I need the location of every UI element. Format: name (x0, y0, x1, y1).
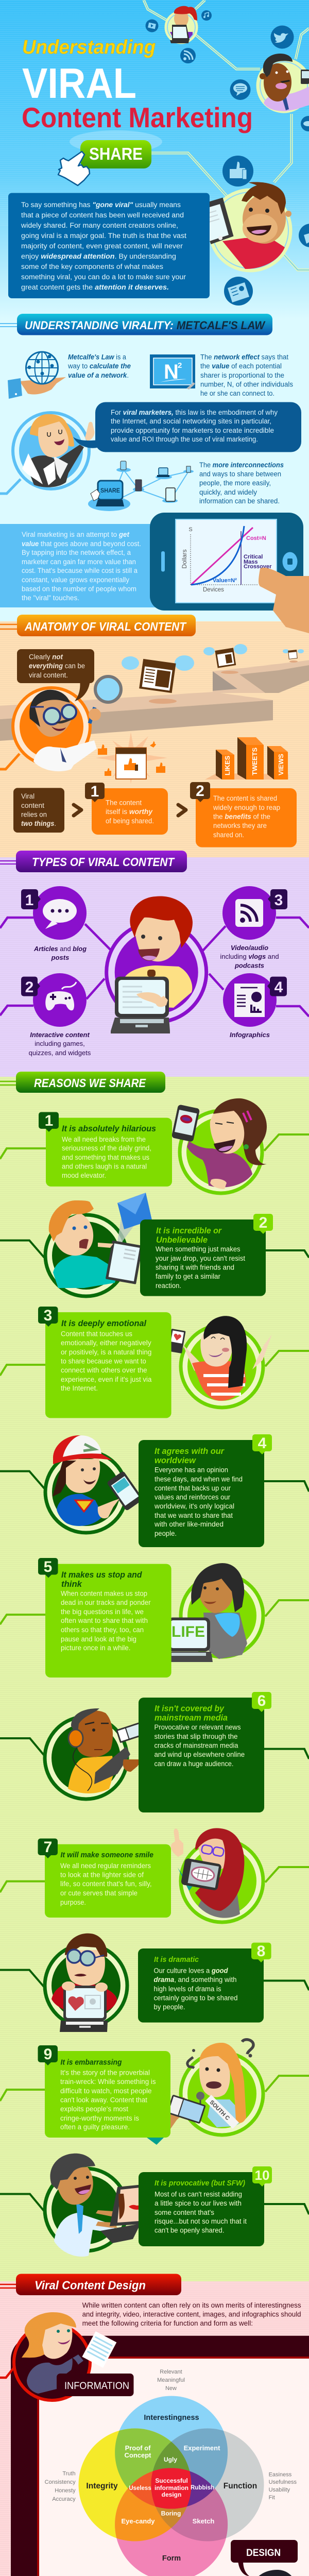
text: network effect: sharer is proportional to the (200, 371, 284, 379)
text: interconnections: information can be shared. (199, 497, 280, 505)
text box: embarrassing: exploits people's most (60, 2105, 128, 2113)
text box: mainstream media: cracks of mainstream media (154, 1742, 238, 1750)
text box: hilarious: and something that makes us (62, 1154, 149, 1161)
venn diagram: Accuracy (52, 2496, 76, 2502)
text box: smile: It will make someone smile (61, 1851, 153, 1859)
icon: chat (230, 79, 250, 100)
intro text box: that a piece of content has been well received and (21, 211, 184, 219)
icon: rss (180, 48, 196, 63)
type 2: interactive: 2 (25, 979, 33, 996)
chart: likes tweets views: LIKES (224, 755, 231, 775)
type 2: interactive: Interactive content (30, 1031, 90, 1039)
panel: anatomy of viral content (0, 615, 309, 847)
intro text box: some of the key components of what makes (21, 263, 163, 270)
text box: incredible: reaction. (156, 1282, 181, 1290)
venn diagram: Concept (125, 2451, 151, 2459)
icon: video (145, 20, 159, 32)
character: scientist with magnifier (0, 676, 121, 771)
text: criteria: While written content can often rely on its own merits of interestingness (82, 2301, 301, 2309)
text: network effect (200, 353, 293, 397)
heading: viral content design (0, 2274, 181, 2295)
intro text box: great content gets the attention it deserves. (21, 283, 169, 291)
reason 1 (39, 1098, 267, 1193)
icon: page with thumbs (96, 732, 167, 784)
character: man with headphones (45, 1708, 146, 1799)
band: viral marketing explanation (0, 524, 160, 607)
text box: provocative: 10 (255, 2167, 269, 2183)
venn diagram (45, 2369, 297, 2576)
text box: emotional: 3 (44, 1307, 52, 1324)
venn diagram: Integrity (86, 2482, 118, 2490)
text box: provocative (139, 2166, 272, 2246)
step 1: 1 (91, 783, 99, 800)
phone with chart (150, 513, 303, 611)
text box: mainstream media: Provocative or relevant news (154, 1723, 241, 1731)
text box: worldview: that we want to share that (154, 1512, 233, 1519)
reason 5 (38, 1558, 263, 1677)
text box: embarrassing (38, 2045, 170, 2138)
intro text box: To say something has "gone viral" usually means (21, 201, 181, 209)
text box: stop and think: dead in our tracks and ponder (61, 1599, 151, 1606)
band: viral marketing explanation: cost. That's because while cost is still a (22, 567, 138, 574)
character: girl with phone (167, 1316, 272, 1408)
icon: N squared: N (164, 361, 179, 383)
text box: incredible: your jaw drop, you can't resist (156, 1255, 245, 1262)
text box: hilarious: mood elevator. (62, 1172, 106, 1179)
venn diagram: Usability (269, 2487, 290, 2493)
text box: smile: or cute serves that simple (60, 1889, 138, 1897)
text box: provocative: It is provocative (but SFW) (154, 2179, 245, 2188)
step 1: itself is worthy (106, 808, 153, 816)
speech bubble: viral marketers: provide opportunity for marketers to create incredible (111, 427, 274, 434)
heading: viral content design: Viral Content Design (35, 2279, 146, 2292)
text box: worldview: Everyone has an opinion (154, 1466, 228, 1474)
venn diagram: New (165, 2385, 177, 2392)
reason 6 (45, 1692, 271, 1812)
text box: embarrassing: It is embarrassing (61, 2058, 122, 2067)
venn diagram: Usefulness (269, 2479, 297, 2485)
text box: mainstream media (139, 1692, 271, 1812)
band: viral marketing explanation: Viral marketing is an attempt to get (22, 531, 130, 538)
intro text box: enjoy widespread attention . By understanding (21, 252, 176, 260)
text box: embarrassing: can't look away. Content that (60, 2096, 147, 2104)
icon: globe on hand (8, 352, 66, 399)
band: viral marketing explanation: By tapping into the network effect, a (22, 549, 131, 556)
arrow (178, 805, 186, 816)
text box: worldview: content that backs up our (154, 1484, 231, 1492)
frame (11, 2336, 309, 2576)
venn diagram: Useless (129, 2485, 151, 2492)
speech bubble: viral marketers (73, 402, 301, 452)
character: designer with stylus (219, 2570, 304, 2576)
speech bubble: not everything (17, 649, 94, 701)
text: interconnections (199, 461, 284, 505)
venn diagram: Truth (62, 2471, 76, 2477)
share button: SHARE (89, 144, 143, 163)
text box: embarrassing: often a guilty pleasure. (60, 2123, 130, 2131)
character: pageant woman: SOUTH C (209, 2099, 231, 2122)
text box: dramatic: It is dramatic (154, 1955, 199, 1964)
reason 4 (45, 1434, 272, 1547)
speech bubble: viral marketers: value and ROI through the use of viral marketing. (111, 435, 258, 443)
text box: emotional: emotionally, either negatively (61, 1339, 151, 1347)
text box: provocative: a little spice to our lives with (154, 2199, 242, 2207)
text box: dramatic: drama, and something with (153, 1976, 237, 1984)
venn diagram: Proof of (125, 2444, 151, 2452)
icon: music (201, 10, 212, 21)
reason 7 (38, 1828, 263, 1922)
reason 9 (38, 2040, 263, 2145)
heading: anatomy (0, 615, 196, 636)
text box: worldview (139, 1434, 272, 1547)
step 2: networks they are (213, 822, 267, 829)
venn diagram: Experiment (184, 2444, 220, 2452)
chart: likes tweets views (205, 737, 288, 779)
arrow (74, 805, 81, 816)
text: interconnections: quickly, and widely (199, 488, 257, 496)
character: man with laptop (45, 2154, 148, 2257)
character: boy with tablet (196, 182, 291, 272)
step 1: of being shared. (106, 817, 154, 825)
text box: stop and think: picture once in a while. (61, 1644, 131, 1652)
character: man with laptop (107, 896, 207, 1033)
text box: provocative: can't be openly shared. (154, 2227, 225, 2234)
text box: stop and think: the big questions in life, we (61, 1608, 144, 1616)
intro text box: widely shared. For many content creators online, (21, 222, 178, 229)
network diagram (88, 461, 194, 511)
type 1: articles: Articles and blog (33, 945, 87, 953)
text box: incredible: Unbelievable (156, 1235, 208, 1245)
reason 3 (38, 1307, 272, 1418)
type 3: video and audio (220, 886, 287, 970)
connector lines (0, 918, 309, 1016)
text box: mainstream media: It isn't covered by (154, 1703, 225, 1713)
heading: anatomy: ANATOMY OF VIRAL CONTENT (24, 620, 187, 633)
text: Metcalfe's Law (67, 353, 131, 379)
type 2: interactive (21, 973, 91, 1057)
band: viral marketing explanation: constant, value grows exponentially (22, 576, 129, 584)
text box: hilarious: seriousness of the daily grind, (62, 1144, 151, 1152)
phone with chart: Cost=N (246, 535, 266, 541)
venn diagram: Meaningful (157, 2377, 185, 2383)
venn diagram: Successful (155, 2477, 188, 2484)
connector lines: light green (0, 1134, 309, 2101)
phone with chart: Crossover (244, 564, 272, 570)
text box: hilarious: We all need breaks from the (62, 1136, 146, 1143)
character: boy in cap (45, 1435, 143, 1533)
network lines (144, 0, 309, 270)
text: interconnections: and ways to share between (199, 470, 281, 478)
step 2: 2 (196, 783, 204, 800)
venn diagram: information (154, 2484, 188, 2492)
title: Content Marketing (22, 101, 253, 133)
venn diagram: Honesty (55, 2487, 76, 2494)
callout: design: DESIGN (246, 2548, 281, 2558)
type 1: articles (21, 886, 87, 961)
type 4: infographics (223, 973, 287, 1039)
intro text box: something viral, you can do a lot to make sure your (21, 273, 186, 281)
text box: two things: relies on (21, 811, 47, 819)
step 2 (190, 782, 297, 847)
text box: incredible: sharing it with friends and (156, 1264, 234, 1272)
speech bubble: not everything: viral content. (29, 671, 68, 679)
text box: incredible: family to get a similar (156, 1273, 220, 1280)
text box: two things (13, 788, 64, 833)
text box: worldview: 4 (258, 1435, 267, 1452)
text box: stop and think: 5 (44, 1558, 52, 1575)
text box: embarrassing: 9 (44, 2046, 52, 2063)
text box: stop and think: It makes us stop and (61, 1570, 142, 1580)
illustration: road and flying pages (0, 644, 309, 741)
text box: stop and think: think (61, 1579, 83, 1589)
venn diagram: Rubbish (191, 2485, 214, 2491)
text box: two things: Viral (21, 792, 35, 800)
phone with chart: Value=N² (213, 578, 237, 584)
text box: emotional (38, 1307, 171, 1418)
text box: stop and think: others so that they, too, can (61, 1626, 144, 1634)
text box: two things: two things. (21, 820, 56, 827)
panel: viral content design (0, 2274, 309, 2576)
reason 8 (45, 1934, 271, 2032)
band: viral marketing explanation: based on the number of people whom (22, 585, 136, 592)
text box: worldview: worldview, it's only logical (154, 1502, 234, 1510)
text box: dramatic: 8 (257, 1943, 265, 1960)
reason 2 (45, 1193, 273, 1296)
chart: likes tweets views: TWEETS (251, 748, 259, 775)
text box: dramatic: Our culture loves a good (153, 1967, 228, 1974)
character: woman with notes (0, 2312, 116, 2400)
type 3: video and audio: 3 (274, 892, 283, 909)
speech bubble: not everything: everything can be (29, 662, 85, 670)
text box: dramatic: by people. (153, 2003, 185, 2011)
type 4: infographics: Infographics (230, 1031, 270, 1039)
icon: star (299, 224, 309, 247)
text box: stop and think: pause and look at the big (61, 1635, 136, 1643)
share button (70, 130, 162, 168)
text box: emotional: to share because we want to (61, 1357, 146, 1365)
icon: thumbs up (222, 156, 253, 187)
text box: emotional: connect with others over the (61, 1366, 147, 1374)
type 4: infographics: 4 (274, 979, 283, 996)
heading: types (0, 851, 187, 872)
text box: dramatic: certainly going to be shared (153, 1994, 238, 2002)
text box: smile: 7 (44, 1839, 52, 1856)
phone with chart: Devices (203, 587, 224, 593)
intro text box (8, 193, 210, 298)
type 3: video and audio: including vlogs and (220, 953, 279, 960)
text box: embarrassing: train-wreck: While something is (60, 2078, 156, 2086)
callout: design (231, 2540, 298, 2576)
title (22, 37, 253, 133)
text box: embarrassing: cringe-worthy moments is (60, 2114, 139, 2122)
panel: Metcalfe's law (0, 314, 309, 633)
character: woman with LIFE laptop (166, 1563, 263, 1662)
step 2: shared on. (213, 831, 244, 839)
character: woman with LIFE laptop: LIFE (171, 1623, 205, 1640)
text: Metcalfe's Law: Metcalfe's Law is a (68, 353, 126, 361)
text: interconnections: The more interconnections (199, 461, 284, 469)
band: viral marketing explanation: the "viral" touches. (22, 594, 79, 602)
phone with chart: Mass (244, 559, 258, 565)
icon: hand cursor (58, 151, 90, 185)
text box: emotional: the Internet. (61, 1384, 98, 1392)
venn diagram: Form (162, 2554, 181, 2563)
type 3: video and audio: Video/audio (231, 944, 268, 952)
phone with chart: Dollars (181, 549, 188, 569)
type 1: articles: 1 (25, 892, 33, 909)
icon: document (224, 277, 253, 306)
reason 10 (45, 2154, 272, 2257)
venn diagram: Fit (269, 2495, 275, 2501)
text box: smile: life, so content that's fun, silly, (60, 1880, 152, 1888)
heading: types: TYPES OF VIRAL CONTENT (32, 855, 175, 869)
intro text box: majority of content, even great content, will never (21, 242, 183, 250)
text box: dramatic: high levels of drama is (153, 1985, 221, 1993)
heading: reasons: REASONS WE SHARE (34, 1076, 146, 1090)
step 1: The content (106, 799, 142, 807)
text box: incredible: 2 (259, 1214, 267, 1231)
band: viral marketing explanation: marketer can gain far more value than (22, 558, 136, 566)
text: Metcalfe's Law: way to calculate the (67, 362, 131, 370)
text box: worldview: values and reinforces our (154, 1494, 230, 1501)
speech bubble: viral marketers: For viral marketers, this law is the embodiment of why (111, 409, 278, 416)
text box: worldview: worldview (154, 1455, 197, 1465)
text box: smile: purpose. (60, 1899, 86, 1906)
text box: hilarious (39, 1112, 172, 1187)
text box: emotional: Content that touches us (61, 1330, 132, 1337)
character: laughing woman (171, 1098, 267, 1193)
text box: two things: content (21, 802, 44, 809)
text box: dramatic (138, 1943, 271, 2023)
text box: embarrassing: It's the story of the proverbial (60, 2069, 150, 2077)
character: sad boy with glasses (45, 1934, 127, 2032)
text box: smile: to look at the lighter side of (60, 1871, 144, 1879)
character: surprised boy (45, 1193, 152, 1296)
step 2: The content is shared (213, 794, 277, 802)
venn diagram: Boring (161, 2510, 181, 2517)
character: woman with laptop (165, 6, 197, 43)
text box: emotional: It is deeply emotional (61, 1318, 147, 1328)
text: interconnections: people, the more easily, (199, 479, 271, 487)
venn diagram: Sketch (193, 2517, 214, 2525)
text box: mainstream media: can draw a huge audience. (154, 1760, 234, 1768)
text box: provocative: Most of us can't resist adding (154, 2191, 242, 2198)
speech bubble: viral marketers: the Internet, and social networking sites in particular, (111, 417, 271, 425)
text box: embarrassing: difficult to watch, most people (60, 2087, 152, 2095)
venn diagram: Relevant (160, 2369, 182, 2375)
text box: mainstream media: and wind up elsewhere online (154, 1751, 245, 1758)
venn diagram: Easiness (269, 2472, 292, 2478)
venn diagram: Function (224, 2482, 257, 2490)
text box: mainstream media: 6 (258, 1692, 266, 1709)
text box: stop and think: When content makes us stop (61, 1590, 147, 1598)
heading: understanding virality: UNDERSTANDING VIRALITY: METCALF'S LAW (25, 319, 266, 332)
icon: N squared: 2 (178, 361, 182, 370)
title: VIRAL (22, 59, 136, 107)
venn diagram: design (162, 2491, 181, 2498)
venn diagram: Ugly (164, 2456, 177, 2463)
text box: incredible: It is incredible or (156, 1226, 222, 1235)
text box: stop and think (38, 1558, 171, 1677)
step 2: widely enough to reap (213, 804, 280, 811)
step 1 (85, 783, 168, 835)
panel: types of viral content (0, 851, 309, 1057)
speech bubble: not everything: Clearly not (29, 653, 63, 660)
text box: worldview: people. (154, 1530, 177, 1537)
band: viral marketing explanation: value that goes above and beyond cost. (22, 540, 141, 548)
text: network effect: The network effect says that (200, 353, 288, 361)
icon: pointing hand (259, 568, 309, 633)
network diagram: SHARE (100, 487, 120, 494)
text box: stop and think: often want to share that with (61, 1617, 148, 1624)
heading: understanding virality (0, 314, 272, 335)
type 3: video and audio: podcasts (234, 962, 264, 970)
text box: incredible (140, 1214, 273, 1296)
text box: provocative: some content that's (154, 2209, 214, 2216)
character: pageant woman (143, 2040, 263, 2145)
text box: incredible: When something just makes (156, 1245, 241, 1253)
type 2: interactive: including games, (35, 1040, 85, 1047)
text box: emotional: experience, even if it's just via (61, 1376, 152, 1383)
text box: worldview: with other like-minded (154, 1520, 224, 1528)
step 2: the benefits of the (213, 813, 270, 820)
icon: N squared (150, 354, 195, 389)
title: Understanding (22, 37, 156, 58)
text: network effect: number, N, of other individuals (200, 380, 293, 388)
venn diagram: Consistency (45, 2479, 76, 2485)
text box: provocative: risque...but not so much that it (154, 2217, 247, 2225)
chart: likes tweets views: VIEWS (277, 754, 285, 775)
text: criteria: and integrity, video, interactive content, images, and infographics should (82, 2311, 301, 2318)
text box: worldview: It agrees with our (154, 1446, 225, 1456)
text: Metcalfe's Law: value of a network. (68, 371, 129, 379)
type 1: articles: posts (51, 954, 69, 961)
text box: emotional: or positively, is a natural thing (61, 1348, 151, 1356)
character: pointing woman (0, 413, 94, 494)
heading: reasons (0, 1072, 165, 1093)
connector lines: dark green (0, 1241, 309, 2214)
panel: hero (8, 0, 309, 306)
character: man with phone (257, 54, 309, 112)
venn diagram: Eye-candy (121, 2517, 155, 2525)
text box: hilarious: 1 (45, 1112, 53, 1129)
text: criteria: meet the following criteria for function and form as well: (82, 2319, 253, 2327)
type 2: interactive: quizzes, and widgets (29, 1049, 91, 1057)
panel: reasons we share (0, 1072, 309, 2257)
callout: information: INFORMATION (64, 2381, 129, 2392)
icon: twitter (271, 26, 294, 48)
callout: information (57, 2358, 134, 2396)
text box: worldview: these days, and when we find (154, 1475, 243, 1483)
text box: mainstream media: stories that slip through the (154, 1733, 238, 1740)
phone with chart: S (188, 527, 193, 533)
text box: mainstream media: mainstream media (154, 1713, 228, 1723)
text: criteria (82, 2301, 301, 2327)
text box: hilarious: It is absolutely hilarious (62, 1124, 156, 1133)
phone with chart: Critical (244, 554, 263, 560)
venn diagram: Interestingness (144, 2414, 199, 2422)
text: network effect: the value of each potential (200, 362, 282, 370)
intro text box: going viral is a major goal. The truth is that the vast (21, 232, 186, 240)
text: network effect: he or she can connect to. (200, 389, 274, 397)
text box: smile: We all need regular reminders (60, 1862, 151, 1870)
text box: smile (38, 1838, 171, 1918)
character: woman with smile phone (171, 1828, 263, 1922)
text box: hilarious: and others laugh is a natural (62, 1162, 147, 1171)
icon: gamepad (301, 116, 309, 131)
